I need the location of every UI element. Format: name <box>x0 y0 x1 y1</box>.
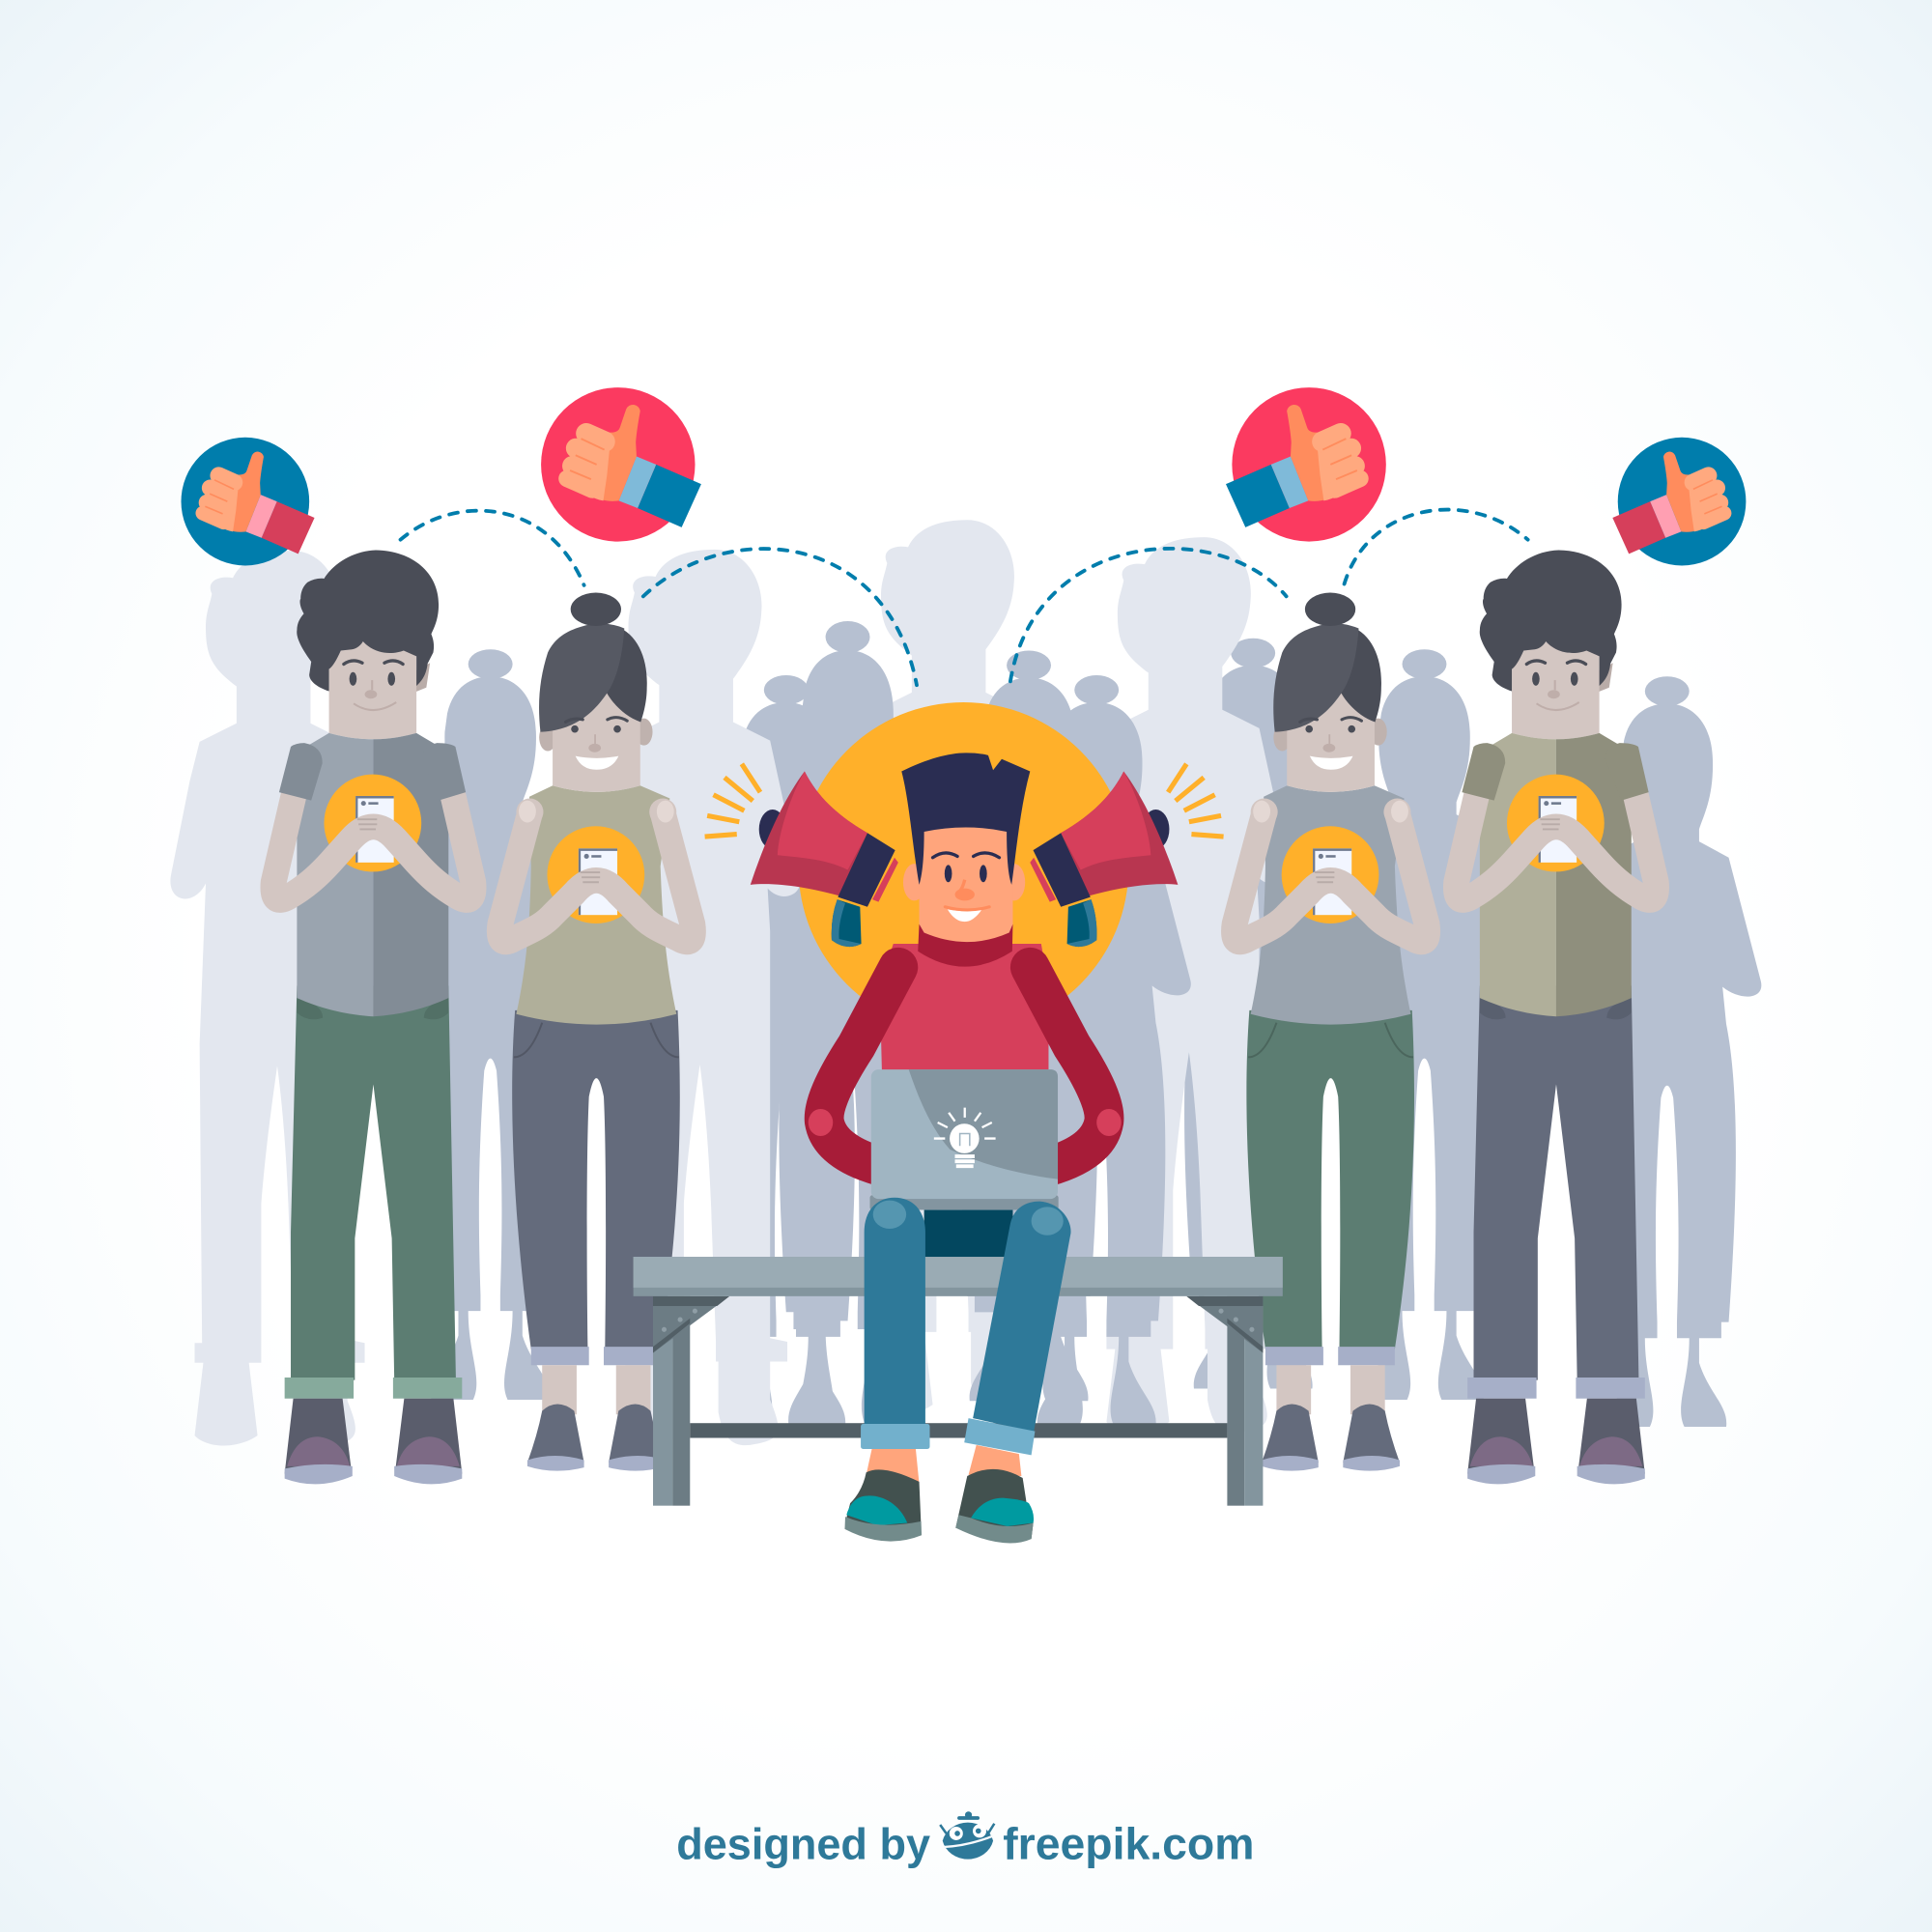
lap <box>924 1210 1012 1257</box>
megaphone rays right <box>1168 764 1224 837</box>
text: designed by: designed by <box>676 1820 930 1869</box>
text: freepik.com: freepik.com <box>1003 1819 1254 1869</box>
megaphone rays left <box>705 764 760 837</box>
icon: freepik robot <box>940 1811 994 1860</box>
dashed connection arcs <box>401 510 1528 685</box>
silhouette crowd <box>170 520 1761 1446</box>
icon: thumbs up blue right <box>1612 438 1746 565</box>
icon: thumbs up red right <box>1226 387 1386 542</box>
laptop <box>870 1069 1059 1210</box>
icon: thumbs up red left <box>541 387 701 542</box>
head <box>901 753 1030 947</box>
central man: influencer <box>751 753 1178 1544</box>
collar <box>918 924 1012 967</box>
elbows <box>809 1109 1122 1136</box>
person: right woman with phone <box>1234 593 1428 1471</box>
arms <box>824 967 1104 1167</box>
torso <box>880 944 1048 1084</box>
left leg <box>844 1198 929 1542</box>
person: right man with phone <box>1456 551 1657 1484</box>
right leg <box>955 1202 1071 1544</box>
yellow sun circle <box>799 702 1128 1033</box>
icon: lightbulb <box>934 1108 996 1168</box>
bench <box>634 1257 1283 1506</box>
logo text: designed by freepik.com <box>676 1811 1254 1869</box>
person: left woman with phone <box>499 593 694 1471</box>
person: left man with phone <box>273 551 473 1484</box>
megaphone left <box>751 771 898 947</box>
icon: thumbs up blue left <box>182 438 315 565</box>
megaphone right <box>1030 771 1178 947</box>
